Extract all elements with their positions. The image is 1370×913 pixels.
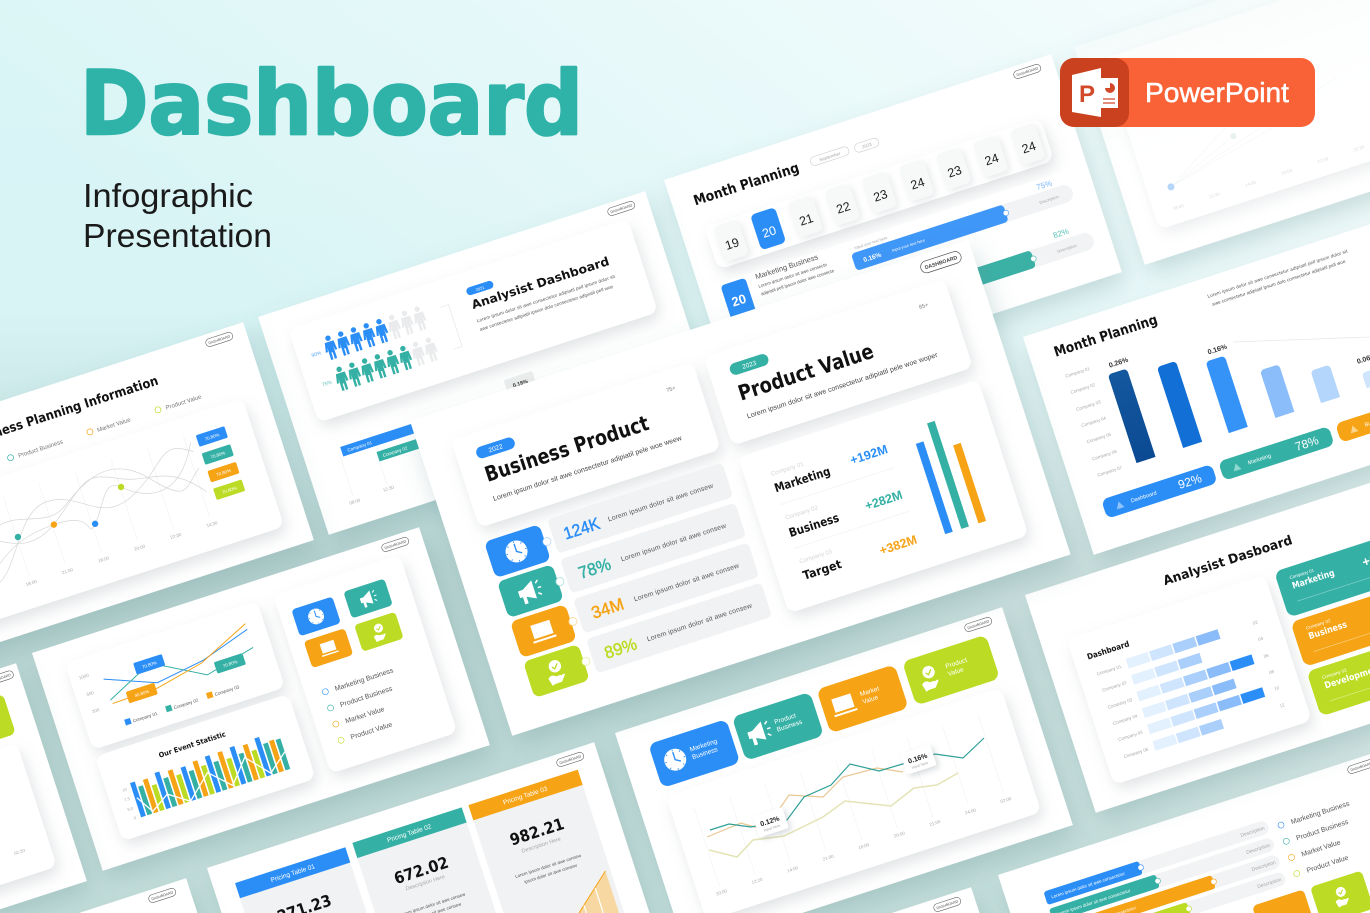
faint line chart panel: 21:00 [1317, 156, 1329, 164]
panel: product value heading: Product Value [735, 339, 877, 405]
panel: our event statistic bars: 5.0 [127, 805, 134, 812]
progress tracks: Lorem ipsum dolor sit awe consectetur [1051, 871, 1126, 899]
pricing column 2: Pricing Table 02 [386, 823, 433, 844]
slide: left edge partial [0, 663, 87, 913]
company 02: Company 02 [785, 505, 819, 522]
tooltips: 0.16% [907, 753, 929, 766]
tile: business [1290, 576, 1370, 667]
calendar panel: 23 [946, 163, 964, 181]
panel: product value heading [704, 279, 973, 446]
stat pill: dashboard: Dashboard [1130, 490, 1158, 504]
dashboard pill [148, 887, 177, 904]
row 34M [509, 542, 760, 658]
progress bars: 82% [1052, 227, 1070, 240]
progress bars: Input your text here [854, 235, 889, 250]
rows: stats list [483, 463, 773, 698]
stat pill: business [1335, 388, 1370, 443]
pricing column 3 [468, 770, 641, 913]
people row 2: 75% [321, 379, 333, 388]
faint line chart panel: 14:00 [1244, 179, 1257, 188]
company 01 [769, 436, 890, 495]
area chart [536, 871, 625, 913]
slide: icons, line chart and event statistic [32, 527, 490, 871]
calendar panel: 24 [1020, 139, 1038, 156]
row 89%: Lorem ipsum dolor sit awe consew [646, 603, 753, 643]
tile: product value [902, 635, 1000, 706]
tooltip 0.18% [504, 371, 537, 395]
panel: our event statistic bars: Our Event Statistic [158, 730, 227, 760]
row 34M: Lorem ipsum dolor sit awe consew [633, 563, 740, 603]
legend list: Marketing Business [334, 667, 395, 693]
chart panel [0, 743, 57, 913]
gantt chart: Company 02 [382, 445, 408, 458]
title: dashboard: Dashboard [80, 52, 583, 155]
progress bars: Description [1039, 194, 1059, 205]
faint line chart panel: 12:30 [1208, 191, 1221, 200]
company 02 [784, 479, 905, 540]
calendar panel: 22 [835, 199, 852, 217]
dashboard pill [1347, 758, 1370, 775]
dashboard pill: DASHBOARD [967, 619, 990, 630]
panel: company values and bars [738, 379, 1029, 613]
dashboard pill: DASHBOARD [208, 334, 231, 345]
faint line chart panel [1104, 0, 1370, 229]
tile: business: Business [1307, 620, 1349, 642]
progress bars: 0.16% [863, 252, 883, 264]
progress tracks: Description [1245, 843, 1271, 856]
description: Lorem ipsum dolor sit awe consectetur adipiatil pell ipsum dolor sit [1207, 248, 1349, 299]
slide: central business product and product value [410, 240, 1071, 736]
panel: our event statistic bars [95, 694, 316, 841]
chart panel: 21:00 [929, 819, 941, 827]
date block and text: 20 [730, 291, 748, 310]
progress bars: Description [1057, 243, 1077, 254]
panel: business product heading: Lorem ipsum dolor sit awe consectetur adipiatil pele woe weew [492, 435, 684, 503]
icon: powerpoint [1060, 58, 1129, 127]
panel: people chart and title [288, 219, 658, 422]
dashboard pill [964, 616, 993, 633]
legend [7, 393, 203, 463]
pricing column 3: Description Here [521, 836, 562, 855]
panel: people chart and title: awe consectetur adipiatil ipsum dolo consectetur adipiatil pell woe [479, 284, 614, 332]
y labels: Company 07 [1097, 465, 1123, 478]
tile: development: Company 03 [1321, 667, 1348, 680]
row 78%: Lorem ipsum dolor sit awe consew [620, 523, 727, 563]
legend list: Product Value [350, 721, 393, 741]
y labels: Company 01 [1065, 366, 1091, 379]
month pills [809, 136, 880, 168]
panel: line chart: Company 02 [173, 697, 199, 710]
month pills: September [819, 151, 842, 162]
panel: our event statistic bars: 7.5 [124, 796, 131, 803]
chart panel: 22:30 [170, 532, 182, 540]
gantt chart: 12:30 [382, 484, 395, 493]
tooltip 0.18%: 0.18% [512, 379, 529, 389]
icon: powerpoint: P [1079, 81, 1095, 108]
dashboard pill [933, 896, 962, 913]
panel: line chart: 200 [91, 707, 100, 714]
panel: our event statistic bars: 0 [133, 815, 137, 821]
legend list: Market Value [345, 706, 386, 725]
legend: Product Business [18, 439, 64, 460]
chart panel: 18:00 [97, 555, 110, 564]
dashboard heat panel: Company 03 [1107, 697, 1133, 710]
title: Month Planning [1052, 312, 1160, 361]
dashboard pill [919, 250, 963, 274]
dashboard pill: DASHBOARD [936, 899, 959, 910]
legend list: Market Value [1301, 839, 1342, 858]
slide: bottom left partial [0, 878, 257, 913]
dashboard heat panel: 06 [1263, 653, 1270, 659]
panel: business product heading [451, 362, 721, 528]
panel: line chart: 500 [86, 690, 95, 697]
title: Month Planning [692, 160, 801, 209]
dashboard heat panel: Company 06 [1123, 746, 1149, 759]
date block and text: Marketing Business [754, 252, 819, 281]
gantt chart: Company 01 [347, 440, 373, 453]
panel: line chart [65, 601, 285, 750]
panel: line chart: 70.80% [141, 660, 157, 670]
badge: powerpoint: PowerPoint [1145, 77, 1289, 108]
row 124K: Lorem ipsum dolor sit awe consew [607, 483, 714, 523]
progress tracks: Description [1251, 860, 1277, 873]
dashboard pill [205, 331, 234, 348]
calendar panel: 24 [983, 151, 1001, 169]
panel: people chart and title: Lorem ipsum dolor sit awe consectetur adipiatil pell ipsum dolor sit [476, 274, 616, 323]
y labels: Company 06 [1092, 449, 1118, 461]
legend list: Product Business [1295, 819, 1350, 842]
dashboard pill: DASHBOARD [151, 890, 174, 901]
subtitle: Presentation [83, 217, 272, 254]
faint line chart panel: 20:00 [1281, 168, 1293, 176]
panel: product value heading: 2023 [741, 360, 758, 371]
title: Analysist Dasboard [1161, 533, 1294, 589]
pricing column 3: ipsum dolor sit awe consew [524, 863, 578, 884]
tile: business: Company 02 [1305, 618, 1332, 631]
side tags: 70.80% [210, 450, 226, 460]
progress bars: 75% [1035, 179, 1053, 192]
tile: product value: Product [945, 657, 968, 670]
progress tracks [1043, 819, 1287, 913]
tile: marketing: Marketing [1291, 569, 1336, 592]
tile: marketing business: Marketing [689, 738, 719, 754]
slide: description tracks bottom right [998, 749, 1370, 913]
chart panel: 12:20 [751, 877, 764, 885]
pricing column 3: Pricing Table 03 [502, 786, 549, 807]
progress bars [848, 172, 1096, 320]
dashboard pill [381, 536, 410, 553]
pricing column 3: Lorem ipsum dolor sit awe consew [514, 853, 582, 879]
slide: line chart with tiles [615, 607, 1073, 913]
panel: product value heading: Lorem ipsum dolor sit awe consectetur adipiatil pele woe woper [746, 352, 939, 420]
chart panel [0, 398, 284, 637]
slide: bottom middle partial [584, 887, 1042, 913]
dashboard heat panel: Company 04 [1112, 713, 1139, 726]
side tags: 70.80% [216, 468, 232, 477]
calendar panel [704, 118, 1054, 270]
company 03: Company 03 [799, 549, 834, 565]
dashboard heat panel: 10 [1273, 685, 1280, 691]
date block and text: adipiatil pell ipsum dolor awe consecte [760, 268, 835, 296]
company 03 [798, 523, 919, 583]
dashboard heat panel: Company 02 [1101, 680, 1128, 693]
chart panel: 14:30 [206, 520, 219, 528]
pricing column 2 [352, 807, 525, 913]
dashboard pill: DASHBOARD [1016, 66, 1039, 77]
calendar panel: 20 [760, 223, 778, 241]
gantt chart: 08:00 [349, 497, 361, 506]
tile: product value: Value [947, 666, 965, 678]
company 03: Target [801, 557, 844, 583]
row 78%: 78% [576, 555, 613, 583]
tile: product business: Product [774, 712, 797, 726]
stat pill: dashboard: 92% [1176, 471, 1204, 492]
legend list: Product Business [339, 685, 394, 709]
slide: analysist dashboard [258, 191, 716, 535]
subtitle [83, 177, 272, 254]
dashboard heat panel: 02 [1252, 619, 1259, 626]
tooltips: Input here [911, 761, 929, 770]
bar chart [1104, 283, 1370, 463]
stat pill: marketing: 78% [1293, 433, 1321, 454]
row 89%: 89% [602, 634, 639, 663]
icon tiles [291, 579, 404, 669]
pricing column 2: Description Here [405, 874, 446, 892]
dashboard heat panel: Dashboard [1086, 639, 1131, 662]
people row 1: 90% [311, 350, 323, 359]
company 01: Marketing [773, 464, 832, 495]
dashboard heat panel: 12 [1279, 702, 1286, 709]
side tags: 70.80% [204, 432, 220, 442]
people row 1 [307, 305, 429, 365]
date block and text: Lorem ipsum dolor sit awe consecte [758, 262, 828, 289]
panel: business product heading: 75+ [666, 385, 677, 394]
slide: faint chart top right [1074, 0, 1370, 265]
tile: development [1307, 625, 1370, 716]
tooltips: Input here [763, 824, 781, 833]
slide: business planning information [0, 322, 314, 666]
y labels: Company 05 [1086, 432, 1112, 444]
chart panel: 20:00 [893, 830, 906, 839]
panel: people chart and title: 2021 [475, 284, 486, 292]
gantt chart [332, 401, 501, 506]
vertical bars [911, 415, 986, 534]
calendar panel: 21 [798, 211, 815, 229]
company 02: +282M [863, 488, 904, 513]
dashboard pill: DASHBOARD [559, 754, 582, 765]
y labels: Company 04 [1081, 415, 1107, 428]
legend: Market Value [97, 417, 132, 434]
faint line chart panel: 18:00 [1172, 203, 1185, 211]
tile: marketing [1274, 526, 1370, 618]
y labels: Company 03 [1076, 399, 1102, 412]
chart panel: 20:00 [715, 888, 728, 897]
chart panel: 21:00 [822, 853, 835, 862]
row 89% [522, 582, 773, 698]
slide: month planning bars [1023, 211, 1370, 555]
panel: line chart: 40.80% [134, 689, 150, 698]
pricing column 1 [235, 847, 409, 913]
company 03: +382M [878, 533, 919, 558]
dashboard pill [607, 200, 636, 217]
panel: line chart: Company 03 [214, 684, 240, 697]
tile: marketing business: Business [691, 746, 719, 761]
calendar panel: 23 [872, 187, 889, 205]
dashboard heat panel: Company 05 [1118, 729, 1144, 742]
tile: product business: Business [776, 719, 804, 734]
dashboard pill: DASHBOARD [924, 255, 958, 271]
dashboard pill: DASHBOARD [384, 539, 407, 550]
slide: pricing tables [207, 742, 665, 913]
chart panel: 21:00 [61, 567, 74, 575]
row 124K [483, 463, 734, 578]
chart panel: 24:00 [964, 807, 977, 816]
row 124K: 124K [561, 514, 603, 543]
progress tracks: Description [1240, 825, 1266, 839]
calendar panel: 19 [723, 235, 741, 253]
legend: Product Value [165, 394, 203, 412]
bar chart: 0.26% [1108, 357, 1130, 370]
tile: market value: Value [862, 694, 879, 706]
progress bars: Input your text here [891, 237, 926, 253]
dashboard pill: DASHBOARD [610, 203, 633, 214]
panel: line chart: Company 01 [132, 711, 159, 724]
chart panel: 02:00 [1000, 796, 1012, 804]
y labels [1065, 366, 1123, 478]
dashboard heat panel [1067, 575, 1312, 785]
tile: marketing: Company 01 [1289, 567, 1315, 580]
chart panel: 18:00 [25, 579, 38, 587]
row 78% [496, 503, 747, 618]
faint line chart panel: 22:30 [1353, 144, 1366, 153]
stat pill: dashboard [1101, 464, 1218, 519]
tile: market value [816, 664, 909, 733]
panel: line chart: 1000 [78, 673, 90, 681]
company 01: Company 01 [770, 461, 805, 478]
panel: our event statistic bars: 10 [122, 786, 128, 793]
chart panel: 16:00 [858, 842, 870, 850]
tile: product business [732, 692, 824, 761]
line series [707, 738, 984, 857]
chart panel: 20:00 [134, 543, 146, 552]
dashboard heat panel: 04 [1257, 636, 1264, 642]
legend list [322, 667, 411, 745]
badge: powerpoint [1060, 58, 1315, 127]
pricing column 1: Pricing Table 01 [270, 863, 316, 884]
dashboard pill [0, 670, 14, 686]
y labels: Company 02 [1070, 382, 1096, 395]
legend list [1277, 800, 1367, 879]
chart panel: 02:20 [13, 848, 26, 856]
chart panel: 14:00 [786, 865, 799, 873]
people row 2 [318, 336, 440, 396]
date block and text [720, 249, 841, 324]
panel: icons and legend [273, 555, 457, 774]
panel: business product heading: 2022 [488, 443, 504, 454]
subtitle: Infographic [83, 177, 253, 214]
tile: market value: Market [859, 685, 880, 698]
panel: product value heading: 85+ [918, 302, 929, 311]
slide: month planning calendar [664, 54, 1122, 398]
dashboard heat panel: 08 [1268, 669, 1275, 675]
legend list: Marketing Business [1290, 800, 1351, 826]
panel: business product heading: Business Product [482, 411, 652, 487]
company 01: +192M [848, 442, 889, 467]
tooltips: 0.12% [760, 815, 781, 828]
dashboard pill [556, 751, 585, 768]
side tags [196, 426, 245, 500]
progress tracks: Description [1257, 877, 1282, 890]
green tile [0, 694, 16, 760]
side tags: 70.80% [221, 485, 237, 495]
legend list: Product Value [1306, 855, 1350, 875]
pricing column 3: 982.21 [507, 814, 567, 849]
company 02: Business [787, 511, 841, 540]
dashboard pill [1013, 63, 1042, 80]
slide: analysist dasboard heat chart [1025, 469, 1370, 813]
stat pill: marketing [1218, 426, 1335, 481]
stat pill: marketing: Marketing [1247, 453, 1272, 466]
bar chart: 0.16% [1207, 343, 1229, 356]
description: awe consectetur adipiatil ipsum dolo consectetur adipiatil pell woe [1211, 259, 1346, 307]
chart panel [666, 688, 1041, 913]
row 34M: 34M [589, 594, 626, 623]
tile: marketing business [648, 719, 740, 788]
panel: line chart: 70.80% [222, 659, 238, 669]
pricing column 2: 672.02 [392, 853, 451, 888]
calendar panel: 24 [909, 175, 926, 193]
month pills: 2023 [861, 142, 873, 150]
tooltips [748, 744, 941, 838]
panel: people chart and title: Analysist Dashboard [470, 254, 611, 312]
bottom tiles [1252, 870, 1370, 913]
dashboard heat panel: Company 01 [1096, 664, 1122, 677]
